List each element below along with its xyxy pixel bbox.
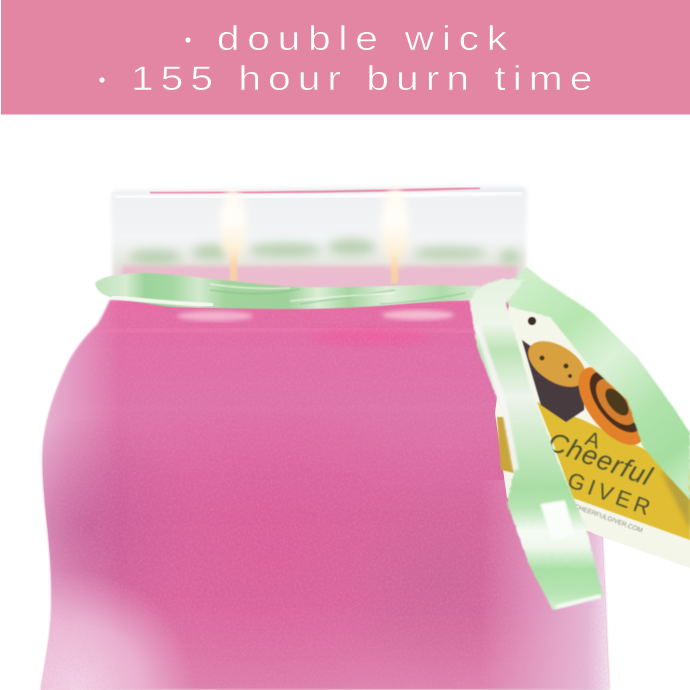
rim highlight — [115, 193, 522, 197]
dark band right — [425, 568, 454, 598]
tag wording — [544, 426, 657, 535]
dark band left — [42, 435, 136, 604]
neck highlights — [177, 311, 253, 321]
ribbon fold lines — [210, 289, 465, 304]
pale bottom left — [41, 580, 184, 690]
tag wording: GIVER — [564, 467, 654, 520]
candle wax body — [30, 300, 620, 690]
yellow label — [537, 402, 690, 540]
pale left edge — [43, 303, 111, 660]
ribbon end fray — [556, 596, 601, 607]
neck shading — [310, 330, 430, 344]
heading line: double wick: double wick — [217, 19, 507, 57]
hang tag — [495, 296, 690, 568]
heading line: 155 hour burn time: 155 hour burn time — [131, 59, 592, 97]
wax grain — [30, 300, 620, 690]
pale right edge — [480, 480, 610, 690]
right flame — [381, 188, 409, 283]
wax surface seen through glass — [122, 266, 517, 292]
front ribbon tail — [470, 279, 603, 610]
ribbon around neck — [95, 273, 480, 309]
ribbon white frayed edge — [477, 325, 516, 470]
tag wording: A — [582, 427, 603, 453]
muffin photo — [520, 332, 594, 422]
ribbon white lower stripe — [112, 297, 213, 305]
candle jar glass rim — [111, 187, 527, 292]
left flame — [220, 188, 246, 281]
olive shade on label — [660, 470, 690, 530]
ribbon white check — [540, 500, 575, 540]
left yellow sliver — [497, 417, 514, 473]
wax line at rim — [150, 188, 480, 193]
back ribbon tail — [500, 267, 690, 500]
tag wording: Cheerful — [544, 426, 657, 492]
green ribbon reflection — [129, 239, 520, 264]
tag wording: CHEERFULGIVER.COM — [573, 503, 643, 535]
cinnamon roll photo — [566, 356, 658, 456]
dark band middle — [258, 538, 282, 572]
tag eyelet — [528, 317, 536, 325]
header banner — [1, 0, 690, 114]
neck band — [97, 329, 490, 332]
